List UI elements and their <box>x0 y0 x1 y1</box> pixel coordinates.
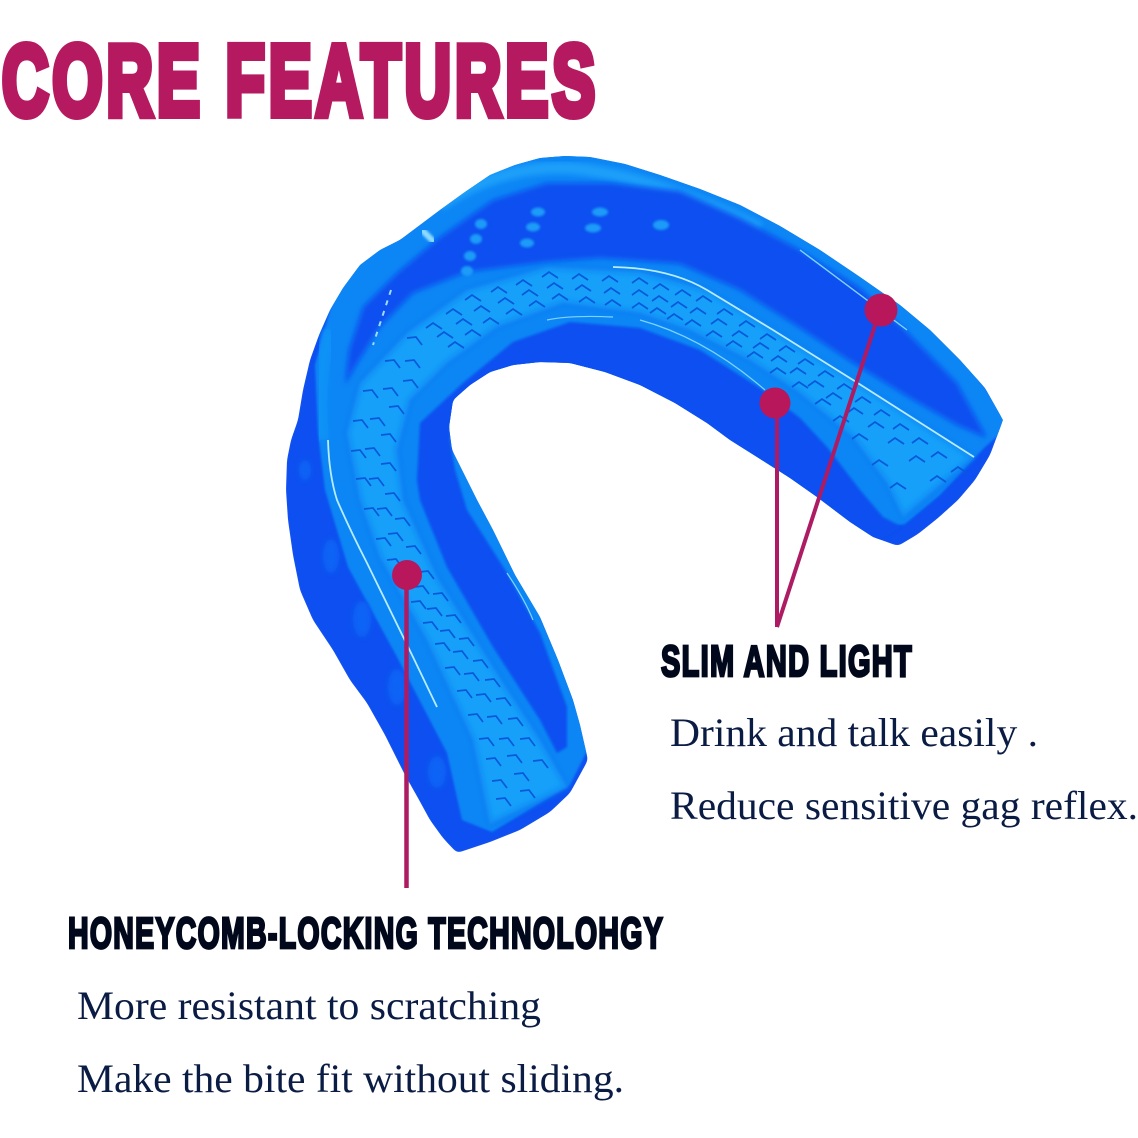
callout lines: slim and light <box>777 310 880 627</box>
tread pattern <box>359 274 959 800</box>
text block: slim and light: Reduce sensitive gag reflex. <box>670 783 1138 828</box>
inner wall: dark channel along the hole <box>417 322 902 753</box>
side vent dashes <box>373 290 391 345</box>
tray border glow <box>347 267 973 824</box>
shaded interior of the guard <box>299 145 1010 832</box>
lighter top rim highlight <box>440 168 760 228</box>
mouthguard illustration <box>286 145 1010 853</box>
text block: slim and light: Drink and talk easily . <box>670 710 1038 755</box>
text block: slim and light <box>670 710 1138 828</box>
white highlight lines <box>613 267 974 457</box>
title: CORE FEATURES <box>2 25 599 137</box>
text block: honeycomb-locking technology <box>77 983 624 1101</box>
callout dot: slim outer wall <box>864 294 898 326</box>
callout dot: slim inner wall <box>760 388 790 418</box>
rim highlight mark <box>423 231 433 241</box>
text block: honeycomb-locking technology: More resistant to scratching <box>77 983 541 1028</box>
rim: light blue band <box>315 145 1010 832</box>
silhouette: dark blue outer shell <box>286 156 1003 853</box>
upper wall: dark channel <box>345 183 987 438</box>
text block: honeycomb-locking technology: Make the bite fit without sliding. <box>77 1056 624 1101</box>
heading: honeycomb-locking technology: HONEYCOMB-LOCKING TECHNOLOHGY <box>68 909 664 958</box>
callout line: honeycomb <box>404 575 409 888</box>
callout dot: honeycomb <box>392 560 422 590</box>
vent holes in upper wall <box>461 208 669 276</box>
bumps on outer shell <box>299 460 446 788</box>
heading: slim and light: SLIM AND LIGHT <box>661 637 913 686</box>
tray: honeycomb-locking surface <box>347 267 973 824</box>
